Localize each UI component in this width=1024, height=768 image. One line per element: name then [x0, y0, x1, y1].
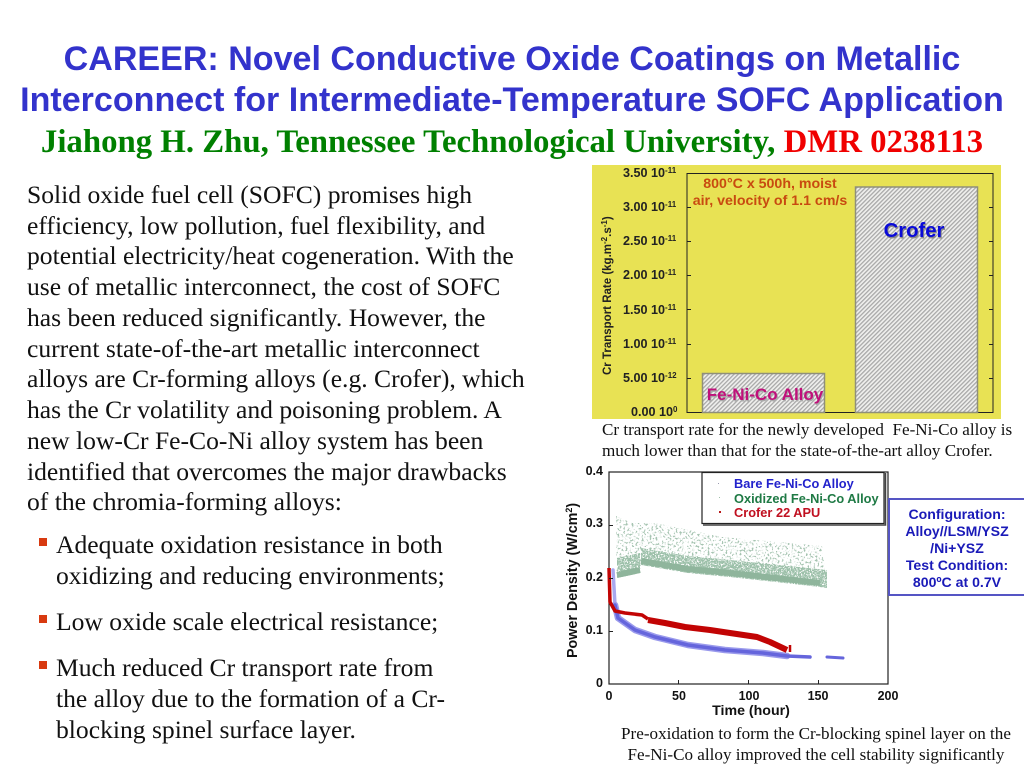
bar: Fe-Ni-Co Alloy: Fe-Ni-Co Alloy	[708, 386, 825, 406]
x axis labels: 200	[878, 689, 898, 703]
body text: alloys are Cr-forming alloys (e.g. Crofer), which	[27, 364, 525, 393]
x axis title: Time (hour)	[712, 703, 790, 719]
y axis labels: 2.00 10	[623, 268, 665, 282]
y axis title: .s	[602, 227, 614, 237]
y axis labels: 0.1	[586, 623, 603, 637]
caption: Cr transport chart	[602, 420, 1012, 460]
callout: configuration and test condition: Configuration:	[908, 506, 1006, 522]
bullet list	[39, 530, 445, 744]
title: Interconnect for Intermediate-Temperature SOFC Application	[20, 81, 1004, 119]
y axis title: Cr Transport Rate (kg.m	[602, 244, 614, 375]
y axis title: )	[565, 503, 581, 508]
y axis labels	[623, 166, 678, 419]
x axis labels: 150	[808, 689, 828, 703]
y axis labels: 1.00 10	[623, 337, 665, 351]
bullet 3: Much reduced Cr transport rate from	[56, 653, 433, 682]
chart background	[592, 165, 1001, 419]
body text: identified that overcomes the major drawbacks	[27, 457, 507, 486]
bullet 3	[39, 653, 445, 744]
y axis title: -2	[600, 236, 609, 244]
y axis labels: 5.00 10	[623, 371, 665, 385]
bullet 1: oxidizing and reducing environments;	[56, 561, 445, 590]
y axis title: -1	[600, 220, 609, 227]
body text: Solid oxide fuel cell (SOFC) promises high	[27, 180, 472, 209]
body text: current state-of-the-art metallic interconnect	[27, 334, 480, 363]
caption: power density chart	[621, 724, 1011, 764]
y axis labels: 0	[596, 676, 603, 690]
y axis labels: -11	[665, 303, 677, 312]
y axis labels: 0	[673, 405, 678, 414]
y axis title: 2	[564, 508, 574, 513]
x axis labels	[606, 689, 898, 703]
callout: configuration and test condition: /Ni+YSZ	[930, 540, 984, 556]
axis tick marks	[609, 526, 818, 684]
y axis labels: -11	[665, 200, 677, 209]
legend	[702, 472, 886, 525]
y axis title: )	[602, 216, 614, 220]
y axis labels: 2.50 10	[623, 234, 665, 248]
x axis labels: 0	[606, 689, 613, 703]
legend: Bare Fe-Ni-Co Alloy	[734, 476, 855, 491]
body text: has been reduced significantly. However, the	[27, 303, 486, 332]
y axis title: Power Density (W/cm	[565, 513, 581, 658]
y axis labels: 0.2	[586, 570, 603, 584]
y axis labels: 3.50 10	[623, 166, 665, 180]
plot frame	[609, 472, 888, 684]
condition note	[693, 176, 847, 209]
y axis labels: 0.00 10	[631, 405, 673, 419]
bar: Crofer	[856, 187, 978, 412]
subtitle: author and award: Jiahong H. Zhu, Tennessee Technological University, DMR 0238113	[41, 124, 983, 160]
caption: power density chart: Fe-Ni-Co alloy improved the cell stability significantly	[628, 745, 1004, 764]
body text: has the Cr volatility and poisoning problem. A	[27, 395, 502, 424]
bullet 2: Low oxide scale electrical resistance;	[56, 607, 438, 636]
condition note: 800°C x 500h, moist	[703, 176, 837, 192]
body text: efficiency, low pollution, fuel flexibility, and	[27, 211, 485, 240]
bullet 3: the alloy due to the formation of a Cr-	[56, 684, 445, 713]
bullet 3: blocking spinel surface layer.	[56, 715, 356, 744]
body text: potential electricity/heat cogeneration. With the	[27, 241, 514, 270]
series: oxidized Fe-Ni-Co alloy	[616, 516, 827, 588]
y axis labels: 0.3	[586, 516, 603, 530]
series: bare Fe-Ni-Co alloy	[613, 570, 843, 658]
legend: Crofer 22 APU	[734, 505, 820, 520]
body text: use of metallic interconnect, the cost of SOFC	[27, 272, 500, 301]
bar: Crofer: Crofer	[884, 220, 945, 242]
y axis tick marks	[687, 208, 993, 378]
caption: power density chart: Pre-oxidation to form the Cr-blocking spinel layer on the	[621, 724, 1011, 743]
body text: new low-Cr Fe-Co-Ni alloy system has been	[27, 426, 483, 455]
body text: of the chromia-forming alloys:	[27, 487, 342, 516]
y axis labels: -11	[665, 166, 677, 175]
callout: configuration and test condition: Test Condition:	[906, 557, 1008, 573]
x axis labels: 100	[739, 689, 759, 703]
plot frame	[687, 174, 993, 412]
condition note: air, velocity of 1.1 cm/s	[693, 193, 847, 209]
bullet 1: Adequate oxidation resistance in both	[56, 530, 443, 559]
y axis labels: 1.50 10	[623, 303, 665, 317]
bar: Fe-Ni-Co Alloy	[702, 374, 825, 412]
caption: Cr transport chart: Cr transport rate for the newly developed Fe-Ni-Co alloy is	[602, 420, 1012, 439]
title	[20, 40, 1004, 119]
series: Crofer 22 APU	[609, 568, 790, 652]
bullet 1	[39, 530, 445, 590]
callout: configuration and test condition: 800ºC at 0.7V	[913, 574, 1001, 590]
y axis labels: 3.00 10	[623, 200, 665, 214]
bar: Crofer: Crofer	[885, 222, 946, 244]
y axis labels: -11	[665, 268, 677, 277]
y axis labels: -11	[665, 234, 677, 243]
y axis labels: -11	[665, 337, 677, 346]
callout: configuration and test condition	[888, 498, 1024, 596]
legend: Oxidized Fe-Ni-Co Alloy	[734, 491, 879, 506]
y axis labels	[586, 464, 603, 690]
title: CAREER: Novel Conductive Oxide Coatings on Metallic	[64, 40, 960, 78]
body text	[27, 180, 525, 516]
callout: configuration and test condition: Alloy//LSM/YSZ	[905, 523, 1009, 539]
bar: Fe-Ni-Co Alloy: Fe-Ni-Co Alloy	[707, 385, 824, 404]
x axis labels: 50	[672, 689, 686, 703]
y axis labels: 0.4	[586, 464, 603, 478]
caption: Cr transport chart: much lower than that for the state-of-the-art alloy Crofer.	[602, 441, 993, 460]
y axis labels: -12	[665, 371, 677, 380]
